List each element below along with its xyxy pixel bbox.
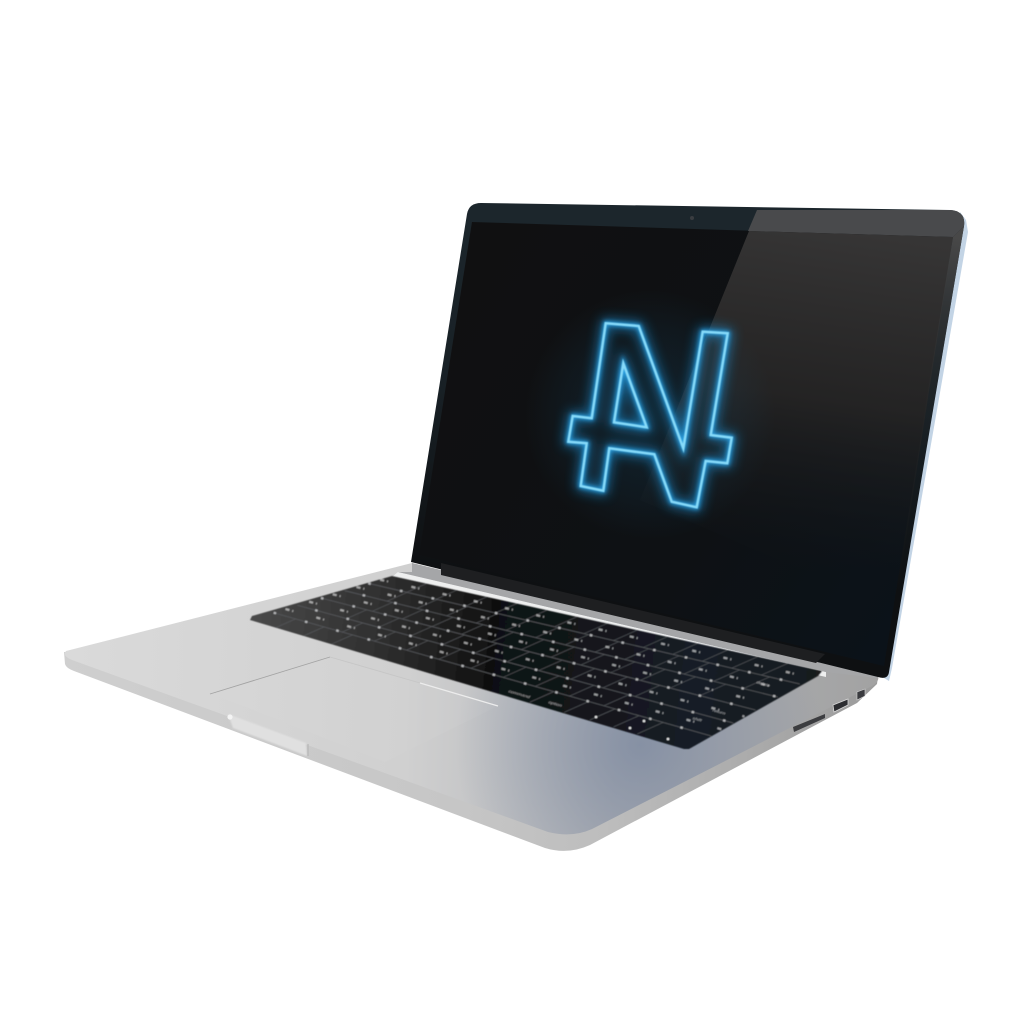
key gaps row 6 [266, 616, 670, 736]
arrow key dots [595, 716, 669, 740]
key gaps row 1 [396, 581, 794, 677]
key row separators [274, 583, 800, 736]
display panel [419, 222, 953, 666]
lid frame [411, 203, 964, 678]
laptop base: front edge [64, 652, 878, 851]
key gaps row 3 [362, 599, 733, 698]
hinge [441, 563, 825, 663]
key gaps row 5 [343, 623, 628, 706]
port: USB [833, 699, 848, 712]
front lip notch [227, 714, 308, 756]
keyboard well [250, 576, 822, 749]
port: SD card slot [793, 714, 825, 732]
key labels: delete [755, 680, 772, 688]
trackpad [210, 657, 498, 762]
logo outer glow [568, 323, 732, 507]
key legend marks [286, 580, 811, 730]
key gaps row 2 [377, 589, 776, 690]
logo inner glow [568, 323, 732, 507]
keyboard [250, 576, 822, 749]
key labels: shift [691, 716, 704, 722]
screen glare [640, 231, 953, 610]
hinge band [398, 563, 878, 678]
key labels: command [507, 689, 532, 699]
webcam [690, 216, 694, 220]
port: USB-C [857, 689, 865, 700]
key labels: return [711, 708, 727, 715]
laptop base: top deck [65, 563, 878, 834]
key labels [507, 680, 772, 722]
keyboard highlight strip [392, 572, 826, 677]
silver key corner gaps [274, 583, 800, 736]
laptop [64, 203, 968, 851]
key gaps row 4 [348, 610, 660, 696]
key labels: option [547, 700, 564, 708]
lid side edge [884, 212, 968, 681]
right bezel glare [919, 226, 964, 445]
logo neon core [568, 323, 732, 507]
lid glare on top bezel [748, 210, 964, 237]
neon logo [525, 290, 775, 540]
laptop lid [411, 203, 968, 681]
